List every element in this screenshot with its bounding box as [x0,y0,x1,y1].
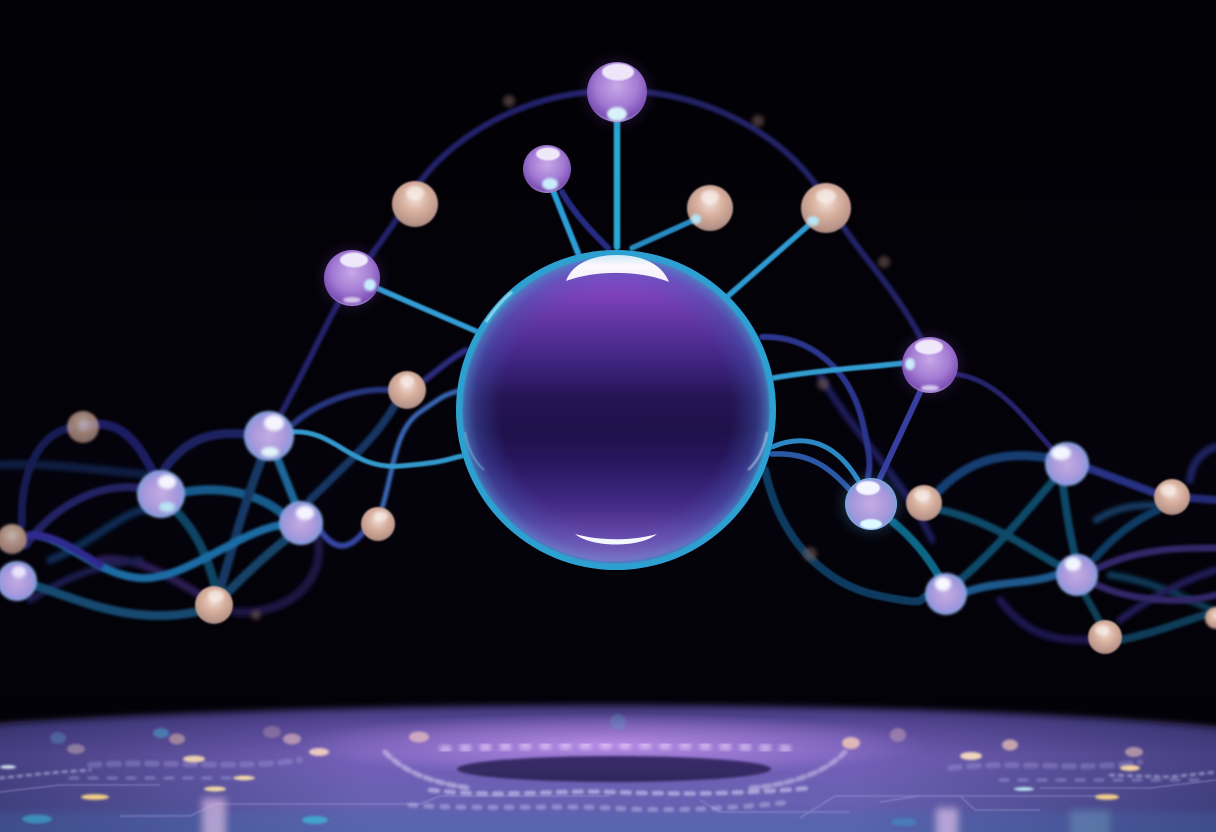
spoke: upper right node [632,220,694,248]
short inner strand behind top [562,192,608,248]
spoke: upper left node [552,188,578,253]
circuit floor surface [0,700,1216,832]
upper-left rim gleam [486,292,512,322]
spoke: right peach node [728,224,810,296]
spoke: left purple node [372,286,478,332]
floor lights [0,714,1143,826]
small distant dots [251,95,890,620]
nodes: purple [324,62,958,393]
sphere side reflections [465,432,484,470]
nodes: peach [0,181,1216,654]
bright cyan spokes from the central sphere [372,120,905,378]
central glass sphere [456,250,776,570]
sphere shadow on floor [457,756,771,782]
sphere rim [456,250,776,570]
node glows [324,62,958,531]
lower inner lens [506,500,726,562]
spoke: right purple node [773,363,905,378]
floor glow [290,713,930,777]
network connection strands [22,92,1216,640]
bottom blue wash [0,812,1216,832]
right outer strand [955,374,1055,452]
right network strands [762,337,870,478]
bottom highlight [575,534,657,544]
floor base [0,705,1216,832]
far network strands [0,375,1216,640]
concentric glow dashes [440,745,800,750]
floor reflections [202,798,1110,832]
spoke: top [614,120,620,247]
left network strands [22,350,466,616]
circuit detail dashes [0,752,1216,810]
top highlight [566,255,669,282]
sphere body [456,250,776,570]
nodes: blue-white [0,411,1098,615]
circuit traces [0,780,1216,818]
top arch: right [645,92,922,340]
floor side falloff [0,715,1216,832]
top arch: left [282,92,590,412]
